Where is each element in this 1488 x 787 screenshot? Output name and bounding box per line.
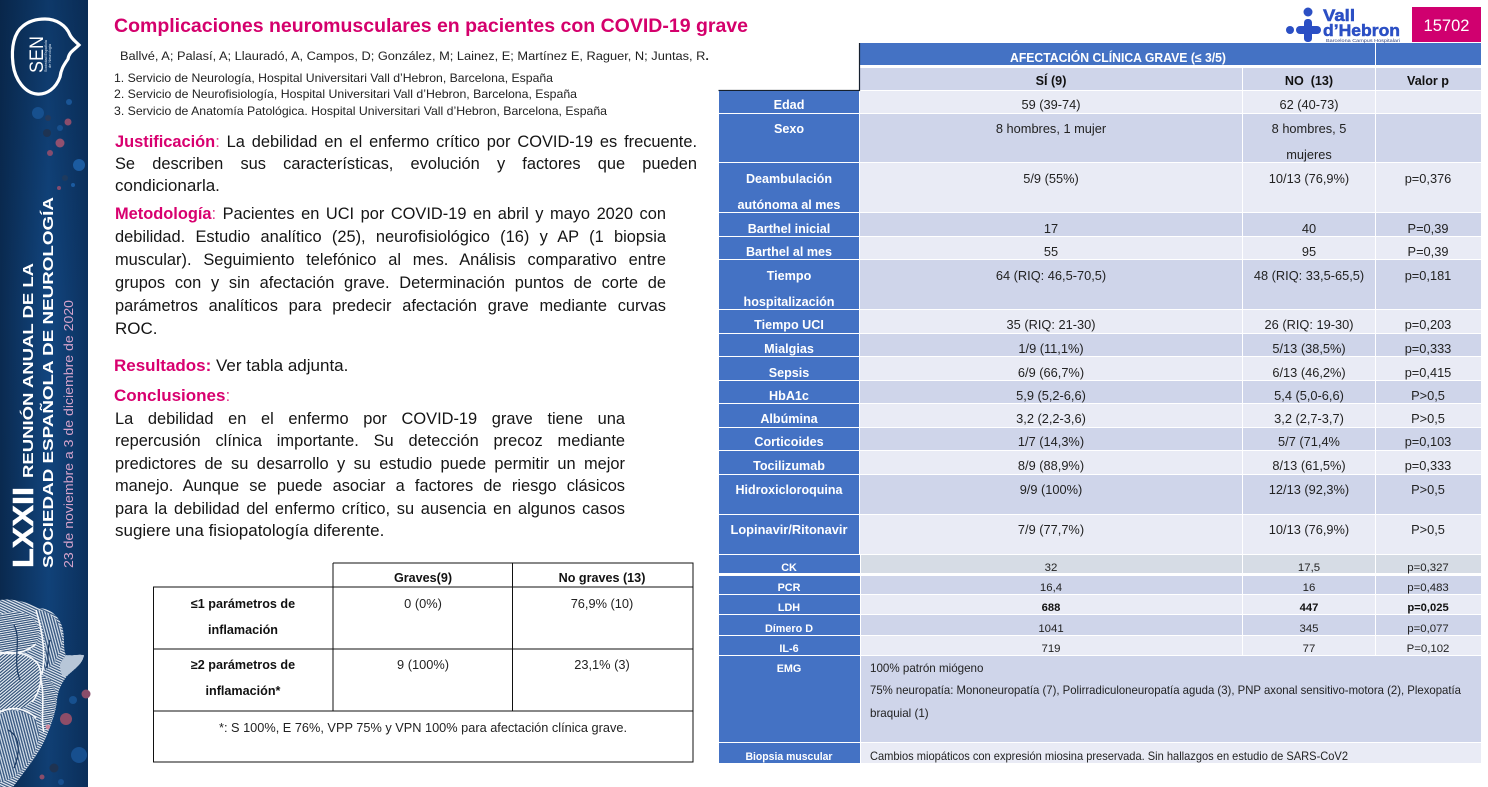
row: Barthel inicial: 17 [1044,221,1058,236]
abstract number badge [1412,7,1481,42]
row: Tocilizumab: p=0,333 [1405,458,1451,473]
text block: metodología [115,205,666,338]
row: PCR: 16,4 [1040,582,1062,594]
row: Albúmina: P>0,5 [1411,411,1445,426]
row: Edad [719,91,1481,113]
row: Dímero D: Dímero D [765,623,813,635]
row: Deambulación: 5/9 (55%) [1023,171,1079,186]
row: Tocilizumab [719,451,1481,474]
text block: resultados: Resultados: Ver tabla adjunta. [114,356,348,375]
text: predictores de su desarrollo y su estudio puede permitir un mejor [115,455,625,473]
row: Corticoides: p=0,103 [1405,434,1451,449]
row: Deambulación: autónoma al mes [738,198,840,212]
row: Tiempo UCI: 26 (RIQ: 19-30) [1265,317,1353,332]
row: Hidroxicloroquina: 12/13 (92,3%) [1269,482,1349,497]
illustration: brain [0,598,86,787]
header row: column names: SÍ (9) [1036,73,1066,88]
row: Corticoides: Corticoides [754,435,824,449]
text block: justificación [115,133,697,195]
row: IL-6: IL-6 [779,643,799,655]
row: Biopsia muscular: Cambios miopáticos con expresión miosina preservada. Sin hallazgos en estudio de SARS-CoV2 [870,750,1348,763]
row: Barthel inicial [719,213,1481,236]
row: HbA1c: P>0,5 [1411,388,1445,403]
row: EMG: braquial (1) [870,707,929,720]
row: Mialgias: p=0,333 [1405,341,1451,356]
row: Mialgias: 5/13 (38,5%) [1272,341,1346,356]
sidebar title: reunión anual: REUNIÓN ANUAL DE LA [19,263,37,478]
row: Dímero D: 345 [1299,623,1319,635]
header row: column names: NO (13) [1285,74,1333,88]
logo: Vall d'Hebron: d’Hebron [1323,21,1400,40]
text: manejo. Aunque se puede asociar a factores de riesgo clásicos [115,477,625,495]
row: Tocilizumab: Tocilizumab [753,459,825,473]
row: EMG [719,656,1481,742]
row: LDH: 688 [1042,602,1060,614]
row: Mialgias [719,334,1481,356]
row: Corticoides [719,428,1481,450]
row: CK: 17,5 [1298,562,1320,574]
title: Complicaciones neuromusculares en pacientes con COVID-19 grave [114,16,748,37]
icon: SEN logo: SEN [27,36,48,73]
molecule dots: bottom [40,690,90,785]
row: Tocilizumab: 8/13 (61,5%) [1272,458,1346,473]
text: repercusión clínica importante. Su detección precoz mediante [115,432,625,450]
row: Sepsis: 6/9 (66,7%) [1018,365,1084,380]
text: Conclusiones: [114,386,230,405]
row: Lopinavir/Ritonavir: 10/13 (76,9%) [1269,522,1349,537]
text: Metodología: Pacientes en UCI por COVID-19 en abril y mayo 2020 con [115,205,666,223]
row: IL-6: 719 [1041,643,1061,655]
table: inflammation parameters: Graves(9) [394,571,452,585]
row: Dímero D: p=0,077 [1407,623,1449,635]
row: Tiempo hospitalización: p=0,181 [1405,268,1451,283]
row: HbA1c: 5,4 (5,0-6,6) [1274,388,1344,403]
row: Albúmina: 3,2 (2,7-3,7) [1274,411,1344,426]
header row: afectación clínica grave [860,43,1481,65]
row: Tiempo UCI: Tiempo UCI [754,318,824,332]
text block: conclusiones [114,386,625,540]
sidebar title: sociedad: SOCIEDAD ESPAÑOLA DE NEUROLOGÍA [39,197,57,568]
row: Deambulación [719,163,1481,212]
row: Barthel al mes: P=0,39 [1408,244,1448,259]
row: Albúmina: Albúmina [760,412,819,426]
text: grupos con y sin afectación grave. Determinación puntos de corte de [115,274,666,292]
row: Sepsis [719,357,1481,380]
row: Lopinavir/Ritonavir: P>0,5 [1411,522,1445,537]
row: Albúmina [719,404,1481,427]
row: LDH: 447 [1300,602,1318,614]
row: Deambulación: Deambulación [746,172,832,186]
abstract number badge: 15702 [1424,17,1469,35]
sidebar title: LXXII: LXXII [8,487,40,568]
table: inflammation parameters: ≤1 parámetros de [191,597,295,611]
table: inflammation parameters: inflamación* [206,684,281,698]
table: inflammation parameters [154,563,693,762]
row: Edad: Edad [774,98,804,112]
row: Tiempo hospitalización: hospitalización [744,295,834,309]
text: parámetros analíticos para predecir afectación grave mediante curvas [115,297,666,315]
row: Corticoides: 1/7 (14,3%) [1018,434,1084,449]
sidebar: congress banner [0,0,90,787]
row: Deambulación: p=0,376 [1405,171,1451,186]
row: PCR: 16 [1303,582,1315,594]
table: inflammation parameters: 23,1% (3) [574,657,630,672]
table: inflammation parameters: ≥2 parámetros de [191,658,295,672]
sidebar date: 23 de noviembre a 3 de diciembre de 2020 [61,300,76,568]
row: Barthel inicial: 40 [1302,221,1316,236]
row: Sexo: 8 hombres, 1 mujer [996,121,1107,136]
affiliations: 3. Servicio de Anatomía Patológica. Hospital Universitari Vall d’Hebron, Barcelona, España [114,105,608,118]
text: Se describen sus características, evolución y factores que pueden [115,155,697,173]
row: Barthel inicial: P=0,39 [1408,221,1448,236]
row: CK: p=0,327 [1407,562,1449,574]
table: inflammation parameters: *: S 100%, E 76%, VPP 75% y VPN 100% para afectación clínica grave. [219,720,627,735]
table: inflammation parameters: 76,9% (10) [571,596,633,611]
row: Tiempo hospitalización: 64 (RIQ: 46,5-70,5) [996,268,1106,283]
row: Barthel al mes [719,237,1481,259]
header row: afectación clínica grave: AFECTACIÓN CLÍNICA GRAVE (≤ 3/5) [1010,50,1226,65]
row: IL-6: 77 [1303,643,1315,655]
row: Tocilizumab: 8/9 (88,9%) [1018,458,1084,473]
row: Lopinavir/Ritonavir: Lopinavir/Ritonavir [730,523,848,537]
row: Deambulación: 10/13 (76,9%) [1269,171,1349,186]
row: Mialgias: Mialgias [764,342,814,356]
row: Sexo [719,114,1481,162]
row: EMG: EMG [777,663,801,675]
row: Dímero D: 1041 [1038,623,1064,635]
row: Dímero D [719,615,1481,635]
row: Edad: 59 (39-74) [1021,97,1081,112]
row: Tiempo UCI: p=0,203 [1405,317,1451,332]
header row: column names: Valor p [1407,74,1449,88]
row: CK: CK [781,562,797,574]
affiliations [114,72,608,118]
row: CK: 32 [1045,562,1057,574]
row: LDH: p=0,025 [1407,602,1449,614]
row: Tiempo UCI: 35 (RIQ: 21-30) [1007,317,1095,332]
row: Edad: 62 (40-73) [1279,97,1339,112]
affiliations: 2. Servicio de Neurofisiología, Hospital Universitari Vall d’Hebron, Barcelona, España [114,88,578,101]
row: Sexo: 8 hombres, 5 [1272,121,1346,136]
table: inflammation parameters: No graves (13) [559,571,645,585]
row: Biopsia muscular: Biopsia muscular [746,751,833,763]
text: Justificación: La debilidad en el enfermo crítico por COVID-19 es frecuente. [115,133,697,151]
table: clinical involvement [718,43,1481,763]
row: Albúmina: 3,2 (2,2-3,6) [1016,411,1086,426]
icon: SEN logo: de Neurología [48,44,52,68]
row: Lopinavir/Ritonavir: 7/9 (77,7%) [1018,522,1084,537]
text: ROC. [115,319,158,338]
text: muscular). Seguimiento telefónico al mes. Análisis comparativo entre [115,251,666,269]
row: LDH: LDH [778,602,800,614]
text: sugiere una fisiopatología diferente. [115,521,384,540]
molecule dots: top [32,99,85,190]
row: LDH [719,595,1481,614]
row: Hidroxicloroquina: 9/9 (100%) [1020,482,1082,497]
row: Hidroxicloroquina: Hidroxicloroquina [736,483,843,497]
row: Barthel inicial: Barthel inicial [748,222,830,236]
row: Tiempo hospitalización: Tiempo [767,269,812,283]
table: inflammation parameters: 9 (100%) [397,657,449,672]
icon: SEN logo [12,19,79,94]
text: para la debilidad del enfermo crítico, su ausencia en algunos casos [115,500,625,518]
row: Lopinavir/Ritonavir [719,515,1481,554]
row: Barthel al mes: 95 [1302,244,1316,259]
row: Hidroxicloroquina: P>0,5 [1411,482,1445,497]
row: Barthel al mes: Barthel al mes [746,245,832,259]
row: Sepsis: Sepsis [769,366,809,380]
icon: SEN logo: Sociedad Española [44,40,48,72]
row: Tiempo hospitalización [719,260,1481,309]
table: inflammation parameters: 0 (0%) [404,596,442,611]
row: PCR: PCR [778,582,801,594]
logo: Vall d'Hebron: Vall [1323,6,1355,25]
row: HbA1c: 5,9 (5,2-6,6) [1016,388,1086,403]
logo: Vall d'Hebron [1286,6,1400,43]
row: Corticoides: 5/7 (71,4% [1278,434,1340,449]
row: Mialgias: 1/9 (11,1%) [1018,341,1084,356]
text: La debilidad en el enfermo por COVID-19 grave tiene una [115,410,625,428]
row: IL-6 [719,636,1481,655]
row: Sepsis: p=0,415 [1405,365,1451,380]
text: debilidad. Estudio analítico (25), neurofisiológico (16) y AP (1 biopsia [115,228,666,246]
row: PCR [719,576,1481,594]
row: PCR: p=0,483 [1407,582,1449,594]
logo: Vall d'Hebron: Barcelona Campus Hospitalari [1326,38,1400,43]
row: EMG: 75% neuropatía: Mononeuropatía (7), Polirradiculoneuropatía aguda (3), PNP axonal sensitivo-motora (2), Plexopatía [870,684,1462,697]
row: Barthel al mes: 55 [1044,244,1058,259]
row: Tiempo hospitalización: 48 (RIQ: 33,5-65,5) [1254,268,1364,283]
row: IL-6: P=0,102 [1407,643,1449,655]
text: condicionarla. [115,176,220,195]
table: inflammation parameters: inflamación [208,623,278,637]
row: HbA1c [719,381,1481,403]
authors: Ballvé, A; Palasí, A; Llauradó, A, Campos, D; González, M; Lainez, E; Martínez E, Raguer, N; Juntas, R . [120,49,709,63]
row: Sexo: Sexo [774,122,804,136]
row: Tiempo UCI [719,310,1481,333]
row: EMG: 100% patrón miógeno [870,662,983,675]
row: Sepsis: 6/13 (46,2%) [1272,365,1346,380]
row: Biopsia muscular [719,743,1481,763]
row: Sexo: mujeres [1286,147,1332,162]
row: HbA1c: HbA1c [769,389,809,403]
header row: column names [860,68,1481,90]
row: Hidroxicloroquina [719,475,1481,514]
row: CK [719,555,1481,574]
affiliations: 1. Servicio de Neurología, Hospital Universitari Vall d’Hebron, Barcelona, España [114,72,554,85]
